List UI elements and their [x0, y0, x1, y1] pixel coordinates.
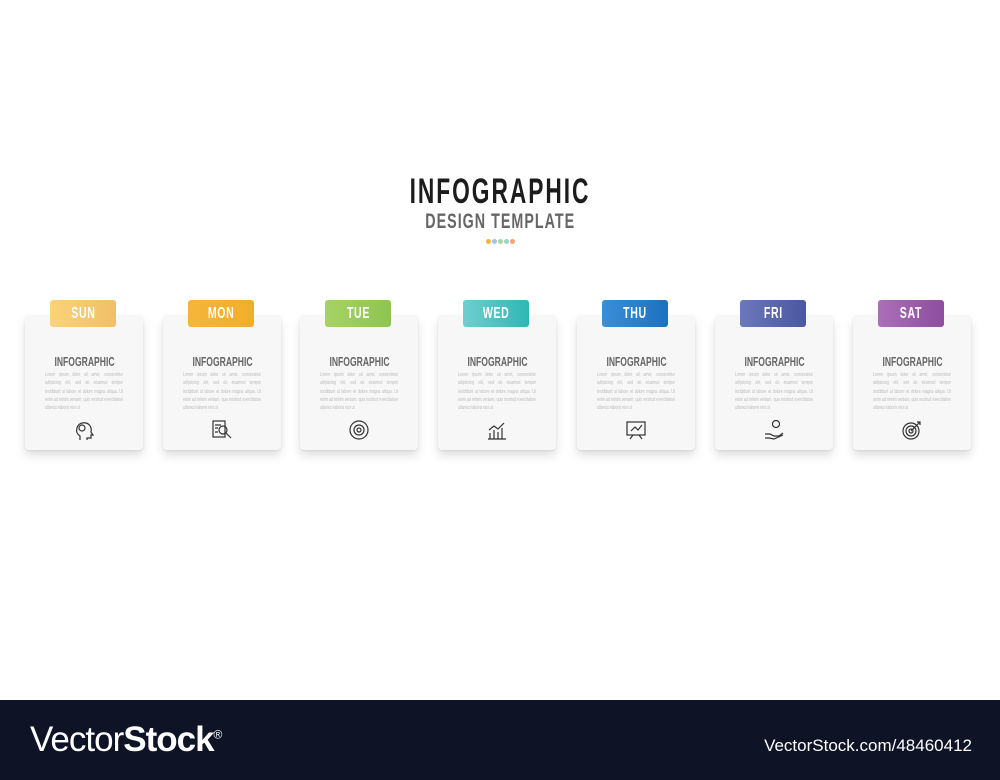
icon: board	[626, 421, 646, 440]
footer	[0, 700, 1000, 780]
text: SUN	[71, 305, 95, 322]
title: INFOGRAPHIC	[410, 172, 590, 211]
text: THU	[623, 305, 647, 322]
card: MON	[163, 315, 281, 450]
card: MON: INFOGRAPHIC	[192, 354, 252, 369]
card: MON: Lorem ipsum dolor sit amet, consectetur adipiscing elit, sed do eiusmod tempor incididunt ut labore et dolore magna aliqua. Ut enim ad minim veniam, quis nostrud exercitation ullamco laboris nisi ut	[183, 372, 261, 411]
card: WED: INFOGRAPHIC	[467, 354, 527, 369]
card: THU: INFOGRAPHIC	[606, 354, 666, 369]
icon: document search	[212, 420, 232, 438]
icon: hand coin	[765, 420, 784, 440]
text: TUE	[346, 305, 370, 322]
card: THU	[577, 315, 695, 450]
card: SAT	[853, 315, 971, 450]
card: SAT: Lorem ipsum dolor sit amet, consectetur adipiscing elit, sed do eiusmod tempor incididunt ut labore et dolore magna aliqua. Ut enim ad minim veniam, quis nostrud exercitation ullamco laboris nisi ut	[873, 372, 951, 411]
subtitle: DESIGN TEMPLATE	[425, 210, 575, 233]
card: THU: Lorem ipsum dolor sit amet, consectetur adipiscing elit, sed do eiusmod tempor incididunt ut labore et dolore magna aliqua. Ut enim ad minim veniam, quis nostrud exercitation ullamco laboris nisi ut	[597, 372, 675, 411]
card: FRI	[715, 315, 833, 450]
card: FRI: INFOGRAPHIC	[744, 354, 804, 369]
text: MON	[208, 305, 234, 322]
card: TUE: Lorem ipsum dolor sit amet, consectetur adipiscing elit, sed do eiusmod tempor incididunt ut labore et dolore magna aliqua. Ut enim ad minim veniam, quis nostrud exercitation ullamco laboris nisi ut	[320, 372, 398, 411]
icon: target circle	[349, 420, 369, 440]
card: TUE: INFOGRAPHIC	[329, 354, 389, 369]
card: WED: Lorem ipsum dolor sit amet, consectetur adipiscing elit, sed do eiusmod tempor incididunt ut labore et dolore magna aliqua. Ut enim ad minim veniam, quis nostrud exercitation ullamco laboris nisi ut	[458, 372, 536, 411]
card: WED	[438, 315, 556, 450]
text: FRI	[764, 305, 782, 322]
icon: bullseye	[902, 421, 921, 440]
text: SAT	[900, 305, 922, 322]
icon: bar chart	[488, 422, 506, 440]
card: FRI: Lorem ipsum dolor sit amet, consectetur adipiscing elit, sed do eiusmod tempor incididunt ut labore et dolore magna aliqua. Ut enim ad minim veniam, quis nostrud exercitation ullamco laboris nisi ut	[735, 372, 813, 411]
card: TUE	[300, 315, 418, 450]
icon: head	[76, 422, 94, 440]
card: SUN: Lorem ipsum dolor sit amet, consectetur adipiscing elit, sed do eiusmod tempor incididunt ut labore et dolore magna aliqua. Ut enim ad minim veniam, quis nostrud exercitation ullamco laboris nisi ut	[45, 372, 123, 411]
text: WED	[483, 305, 509, 322]
card: SUN: INFOGRAPHIC	[54, 354, 114, 369]
footer logo: VectorStock®	[30, 720, 221, 759]
footer url: VectorStock.com/48460412	[764, 736, 972, 755]
card: SAT: INFOGRAPHIC	[882, 354, 942, 369]
card: SUN	[25, 315, 143, 450]
dots	[486, 239, 515, 244]
